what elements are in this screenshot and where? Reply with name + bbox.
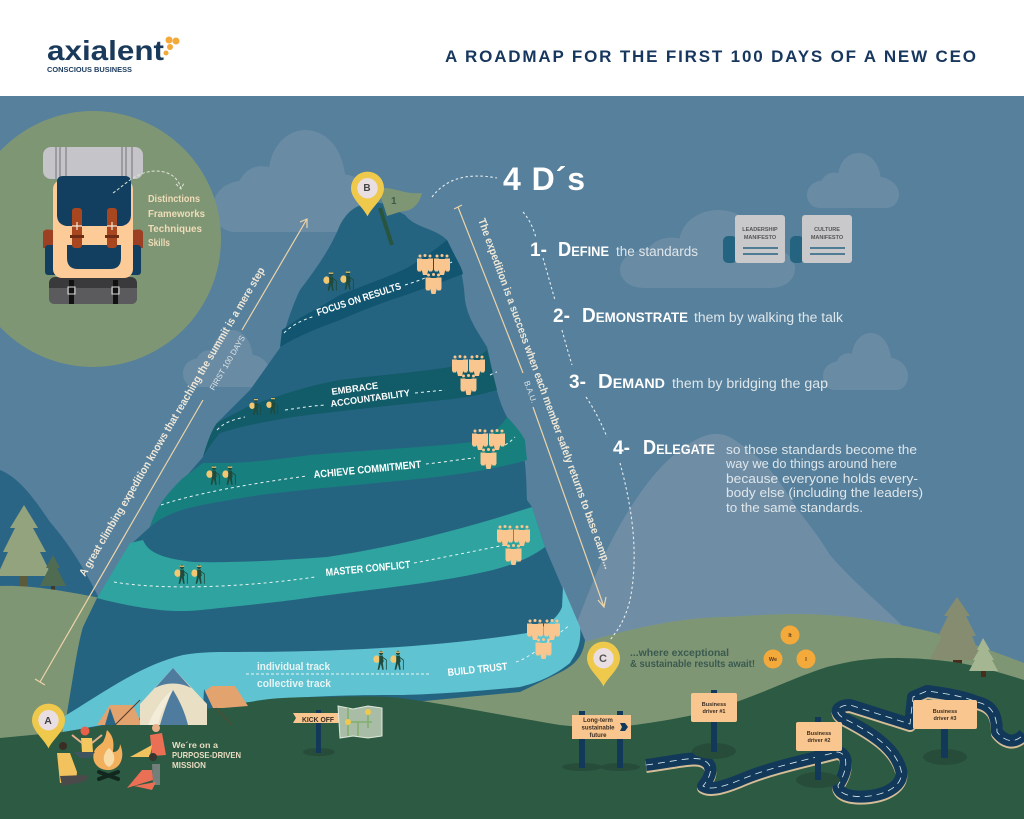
map icon bbox=[338, 706, 382, 738]
camper: seated man bbox=[59, 742, 67, 750]
step 3: 3- bbox=[569, 372, 586, 393]
manifesto icons bbox=[723, 215, 852, 263]
step 3: them by bridging the gap bbox=[672, 376, 828, 391]
text: first 100 days: FIRST 100 DAYS bbox=[208, 334, 247, 392]
band: achieve commitment bbox=[150, 417, 527, 527]
step 4: DELEGATE bbox=[643, 437, 715, 459]
long-term future sign: Long-term bbox=[583, 718, 613, 724]
step 2: 2- bbox=[553, 306, 570, 327]
header band bbox=[0, 0, 1024, 96]
business driver 1 sign bbox=[691, 690, 737, 759]
step 4: because everyone holds every- bbox=[726, 471, 918, 486]
road bbox=[646, 691, 1024, 799]
team icons bbox=[417, 254, 560, 659]
right olive hill bbox=[300, 614, 1024, 780]
business driver 1 sign: driver #1 bbox=[703, 709, 725, 715]
business driver 2 sign: driver #2 bbox=[808, 738, 830, 744]
tents bbox=[97, 668, 248, 725]
business driver 1 sign: Business bbox=[702, 702, 726, 708]
long-term future sign: sustainable bbox=[581, 726, 615, 732]
long-term future sign: future bbox=[590, 733, 607, 739]
mission text: MISSION bbox=[172, 760, 206, 770]
small pale pine bbox=[969, 638, 998, 677]
it we i circles: I bbox=[805, 657, 807, 663]
label: master conflict: MASTER CONFLICT bbox=[325, 559, 411, 579]
camper: woman in yellow bbox=[80, 726, 90, 736]
business driver 2 sign: Business bbox=[807, 731, 831, 737]
band: focus on results bbox=[280, 240, 463, 347]
arrow: expedition success bbox=[454, 205, 614, 607]
summit flag bbox=[378, 188, 422, 245]
results text: & sustainable results await! bbox=[630, 659, 755, 670]
campfire bbox=[99, 772, 118, 779]
step 4: body else (including the leaders) bbox=[726, 485, 923, 500]
step 2: them by walking the talk bbox=[694, 310, 843, 325]
step 1: 1- bbox=[530, 240, 547, 261]
text: great climbing expedition: A great climbing expedition knows that reaching the summit is a mere step bbox=[77, 265, 268, 579]
4Ds section bbox=[432, 161, 923, 640]
band: master conflict bbox=[97, 507, 545, 611]
grey mountain bbox=[570, 434, 925, 660]
summit flag: 1 bbox=[391, 196, 397, 207]
pin C bbox=[587, 642, 620, 686]
label: individual track: individual track bbox=[257, 661, 331, 673]
it we i circles bbox=[764, 626, 816, 668]
it we i circles: We bbox=[769, 657, 777, 663]
step 4: to the same standards. bbox=[726, 500, 863, 515]
step 4: so those standards become the bbox=[726, 442, 917, 457]
pin A bbox=[32, 704, 65, 748]
step 4 bbox=[613, 437, 923, 515]
manifesto icons: MANIFESTO bbox=[744, 235, 777, 241]
backpack contents list: Distinctions bbox=[148, 194, 200, 205]
track dashes bbox=[246, 673, 430, 675]
logo: axialent bbox=[47, 35, 164, 66]
business driver 3 sign: Business bbox=[933, 709, 957, 715]
clouds bbox=[183, 130, 908, 390]
foreground green hill bbox=[0, 658, 1024, 819]
business driver 3 sign bbox=[913, 700, 977, 765]
base camp bbox=[32, 668, 382, 790]
left blue hill bbox=[0, 470, 100, 610]
kick off sign: KICK OFF bbox=[302, 715, 334, 724]
backpack contents list bbox=[148, 194, 205, 249]
dashed arrow: contents bbox=[113, 171, 184, 193]
results text bbox=[630, 648, 755, 670]
mission text bbox=[172, 740, 241, 770]
label: achieve commitment: ACHIEVE COMMITMENT bbox=[313, 459, 422, 481]
heading: 4 D´s bbox=[503, 161, 585, 197]
label: embrace accountability: ACCOUNTABILITY bbox=[330, 388, 411, 410]
summit results area bbox=[587, 626, 816, 686]
text: B.A.U.: B.A.U. bbox=[522, 380, 538, 404]
campers and campfire bbox=[57, 724, 166, 790]
backpack icon bbox=[43, 147, 143, 304]
backpack contents list: Techniques bbox=[148, 224, 202, 235]
band: embrace accountability bbox=[203, 350, 497, 457]
manifesto icons: MANIFESTO bbox=[811, 235, 844, 241]
business driver 3 sign: driver #3 bbox=[934, 716, 956, 722]
text: expedition success: The expedition is a success when each member safely returns to base camp... bbox=[475, 217, 614, 571]
pin C: C bbox=[599, 653, 607, 665]
pin B: B bbox=[363, 183, 371, 194]
left pine bbox=[0, 505, 52, 590]
step 2 bbox=[553, 305, 843, 327]
mission text: PURPOSE-DRIVEN bbox=[172, 750, 241, 760]
business signs bbox=[562, 690, 977, 788]
mountain body bbox=[63, 202, 585, 735]
step 4: way we do things around here bbox=[725, 456, 897, 471]
right pine bbox=[930, 597, 982, 669]
backpack contents list: Frameworks bbox=[148, 209, 205, 220]
label: collective track: collective track bbox=[257, 678, 332, 690]
backpack contents list: Skills bbox=[148, 238, 170, 249]
mountain bbox=[63, 202, 585, 735]
kick off sign bbox=[293, 710, 343, 756]
manifesto icons: CULTURE bbox=[814, 227, 840, 233]
manifesto icons: LEADERSHIP bbox=[742, 227, 778, 233]
step 1: DEFINE bbox=[558, 239, 609, 261]
logo: CONSCIOUS BUSINESS bbox=[47, 65, 132, 74]
label: focus on results: FOCUS ON RESULTS bbox=[316, 281, 403, 319]
business driver 2 sign bbox=[796, 717, 842, 788]
it we i circles: It bbox=[788, 633, 792, 639]
label: build trust: BUILD TRUST bbox=[447, 661, 508, 679]
step 1: the standards bbox=[616, 244, 698, 259]
title: A ROADMAP FOR THE FIRST 100 DAYS OF A NEW CEO bbox=[445, 47, 976, 66]
logo bbox=[47, 35, 180, 74]
step 2: DEMONSTRATE bbox=[582, 305, 688, 327]
pin B bbox=[351, 172, 384, 216]
step 3: DEMAND bbox=[598, 371, 665, 393]
left small pine bbox=[40, 555, 66, 593]
long-term future sign bbox=[562, 711, 640, 771]
arrow: first 100 days bbox=[35, 219, 307, 685]
results text: ...where exceptional bbox=[630, 648, 729, 659]
step 1 bbox=[530, 239, 698, 261]
step 4: 4- bbox=[613, 438, 630, 459]
mission text: We´re on a bbox=[172, 740, 218, 750]
backpack panel bbox=[0, 111, 221, 367]
label: embrace accountability: EMBRACE bbox=[331, 381, 379, 398]
pin A: A bbox=[44, 715, 52, 727]
camper: front woman bbox=[149, 753, 157, 761]
left olive hill bbox=[0, 586, 120, 760]
band: build trust bbox=[63, 587, 580, 732]
hikers bbox=[174, 271, 403, 670]
step 3 bbox=[569, 371, 828, 393]
dashed connectors bbox=[432, 176, 634, 640]
camper: man in red bbox=[152, 724, 160, 732]
